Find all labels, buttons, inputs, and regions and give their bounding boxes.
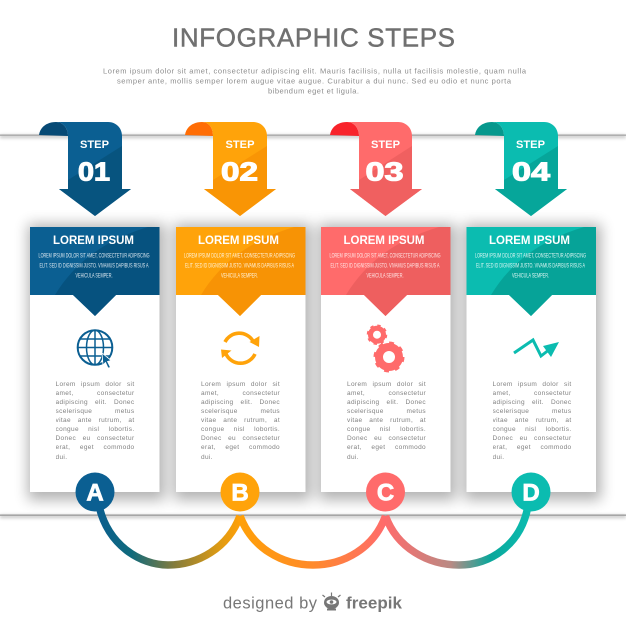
body text 3: Lorem ipsum dolor sit: [347, 380, 426, 388]
panel: card 3: ELIT. SED ID DIGNISSIM JUSTO. VIVAMUS DAPIBUS RISUS A: [330, 262, 440, 270]
body text 4: vitae ante rutrum, at: [492, 417, 572, 424]
panel: card 4: LOREM IPSUM: [489, 235, 570, 247]
card shadows: [28, 224, 601, 500]
intro paragraph: semper ante, mollis semper lorem augue vitae augue. Curabitur a dui nunc. Sed eu odio et nunc porta: [117, 76, 512, 86]
panel: card 2: VEHICULA SEMPER.: [221, 272, 258, 280]
body text 1: vitae ante rutrum, at: [56, 417, 134, 424]
body text 2: [201, 380, 283, 464]
panel: card 1: ELIT. SED ID DIGNISSIM JUSTO. VIVAMUS DAPIBUS RISUS A: [40, 262, 149, 270]
icon: globe with cursor: [78, 330, 112, 368]
badge D: D: [522, 480, 540, 506]
body text 3: Donec eu consectetur: [347, 435, 426, 442]
body text 3: vitae ante rutrum, at: [347, 417, 426, 424]
panel: card 1: [30, 227, 160, 492]
step arrow 1: STEP: [80, 139, 109, 151]
body text 3: congue nisl lobortis.: [347, 426, 426, 433]
body text 3: scelerisque metus: [347, 408, 426, 415]
panel: card 3: LOREM IPSUM: [344, 235, 424, 247]
panel: card 1: LOREM IPSUM DOLOR SIT AMET, CONSECTETUR ADIPISCING: [38, 252, 150, 260]
body text 1: amet, consectetur: [56, 390, 134, 397]
badge A: A: [86, 480, 104, 506]
freepik credit: designed by: [223, 594, 318, 612]
body text 3: [347, 380, 429, 464]
body text 1: scelerisque metus: [56, 408, 134, 415]
body text 2: adipiscing elit. Donec: [201, 399, 280, 406]
body text 2: congue nisl lobortis.: [201, 426, 280, 433]
step arrow 1: [39, 122, 131, 216]
panel: card 2: ELIT. SED ID DIGNISSIM JUSTO. VIVAMUS DAPIBUS RISUS A: [185, 262, 294, 270]
panel: card 2: LOREM IPSUM DOLOR SIT AMET, CONSECTETUR ADIPISCING: [184, 252, 295, 260]
top shelf line: [0, 134, 626, 138]
freepik credit: freepik: [346, 594, 403, 612]
panel: card 2: [176, 227, 306, 492]
body text 2: Lorem ipsum dolor sit: [201, 380, 280, 388]
icon: gears: [368, 326, 403, 371]
body text 2: Donec eu consectetur: [201, 435, 280, 442]
body text 4: amet, consectetur: [492, 390, 572, 397]
bottom shelf line: [0, 514, 626, 518]
freepik credit: [223, 592, 403, 612]
badge B: B: [231, 480, 249, 506]
intro paragraph: [103, 66, 527, 96]
badge D: [512, 472, 550, 512]
step arrow 3: [330, 122, 422, 216]
connector curves: [99, 506, 528, 565]
badge C: [366, 472, 405, 512]
intro paragraph: Lorem ipsum dolor sit amet, consectetur adipiscing elit. Mauris facilisis, nulla ut facilisis molestie, quam nulla: [103, 66, 527, 76]
body text 4: Lorem ipsum dolor sit: [492, 380, 572, 388]
body text 1: dui.: [56, 454, 67, 461]
body text 3: adipiscing elit. Donec: [347, 399, 426, 406]
intro paragraph: bibendum eget et ligula.: [268, 86, 359, 96]
panel: card 1: LOREM IPSUM: [53, 235, 134, 247]
body text 2: scelerisque metus: [201, 408, 280, 415]
step arrow 3: STEP: [371, 139, 400, 151]
body text 4: congue nisl lobortis.: [492, 426, 572, 433]
step arrow 2: 02: [221, 156, 258, 186]
step arrow 1: 01: [78, 156, 110, 186]
step arrow 2: STEP: [226, 139, 254, 151]
body text 4: adipiscing elit. Donec: [492, 399, 572, 406]
step arrow 4: 04: [512, 156, 551, 186]
body text 4: dui.: [492, 454, 504, 461]
body text 1: Donec eu consectetur: [56, 435, 134, 442]
panel: card 1: VEHICULA SEMPER.: [76, 272, 113, 280]
badge A: [76, 472, 114, 512]
panel: card 4: VEHICULA SEMPER.: [512, 272, 549, 280]
badge B: [220, 472, 260, 512]
icon: refresh arrows: [221, 333, 260, 363]
body text 1: [56, 380, 138, 464]
body text 4: Donec eu consectetur: [492, 435, 572, 442]
panel: card 2: LOREM IPSUM: [198, 235, 279, 247]
body text 2: vitae ante rutrum, at: [201, 417, 280, 424]
step arrow 2: [185, 122, 276, 216]
badge C: C: [377, 480, 394, 506]
body text 4: scelerisque metus: [492, 408, 572, 415]
icon: trend arrow: [514, 340, 559, 357]
panel: card 3: [321, 227, 450, 492]
body text 3: erat, eget commodo: [347, 444, 426, 451]
body text 4: erat, eget commodo: [492, 444, 572, 451]
step arrow 3: 03: [366, 156, 404, 186]
panel: card 3: VEHICULA SEMPER.: [366, 272, 404, 280]
body text 4: [492, 380, 574, 464]
step arrow 4: [475, 122, 567, 216]
body text 1: Lorem ipsum dolor sit: [56, 380, 134, 388]
body text 1: adipiscing elit. Donec: [56, 399, 134, 406]
body text 2: dui.: [201, 454, 213, 461]
body text 1: erat, eget commodo: [56, 444, 134, 451]
step arrow 4: STEP: [516, 139, 545, 151]
body text 3: amet, consectetur: [347, 390, 426, 397]
body text 3: dui.: [347, 454, 359, 461]
icon: freepik mascot: [322, 592, 340, 610]
body text 2: erat, eget commodo: [201, 444, 280, 451]
body text 2: amet, consectetur: [201, 390, 280, 397]
panel: card 4: [466, 227, 596, 492]
title: INFOGRAPHIC STEPS: [172, 22, 455, 52]
panel: card 3: LOREM IPSUM DOLOR SIT AMET, CONSECTETUR ADIPISCING: [330, 252, 440, 260]
body text 1: congue nisl lobortis.: [56, 426, 134, 433]
